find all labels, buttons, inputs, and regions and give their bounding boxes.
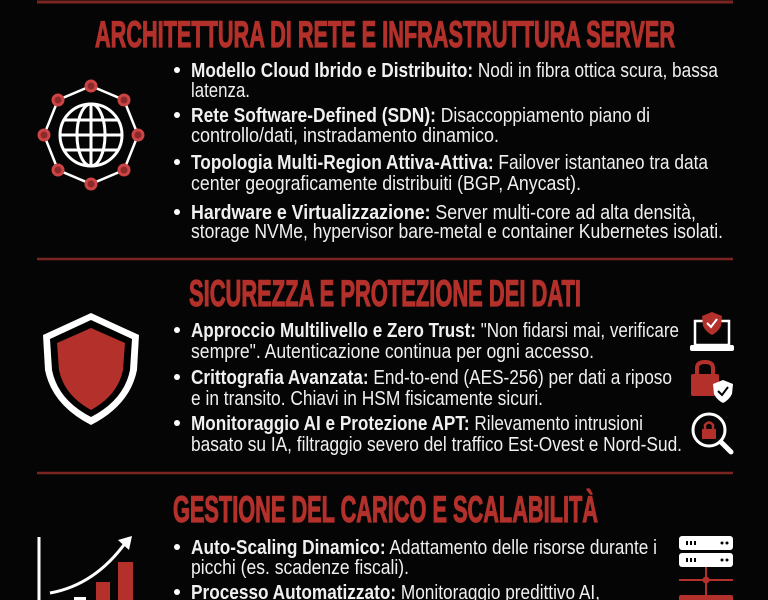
bullets: section 1: Hardware e Virtualizzazione: Server multi-core ad alta densità, [191,202,696,224]
icon: globe network [39,81,143,189]
bullets: section 3: Auto-Scaling Dinamico: Adattamento delle risorse durante i [191,537,657,559]
icon: laptop shield [690,312,734,351]
bullets: section 2: e in transito. Chiavi in HSM fisicamente sicuri. [191,388,543,410]
icon: shield [43,313,139,425]
bullets: section 1 [174,60,723,243]
bullets: section 3 [174,537,657,600]
bullets: section 1: center geograficamente distribuiti (BGP, Anycast). [191,173,581,195]
bullets: section 1: Modello Cloud Ibrido e Distribuito: Nodi in fibra ottica scura, bassa [191,60,719,82]
bullets: section 1: Topologia Multi-Region Attiva-Attiva: Failover istantaneo tra data [191,152,709,174]
bullets: section 3: picchi (es. scadenze fiscali). [191,557,409,579]
bullets: section 2 [174,320,682,456]
bullets: section 2: Crittografia Avanzata: End-to-end (AES-256) per dati a riposo [191,367,672,389]
bullets: section 2: basato su IA, filtraggio severo del traffico Est-Ovest e Nord-Sud. [191,434,682,456]
bullets: section 2: Approccio Multilivello e Zero Trust: "Non fidarsi mai, verificare [191,320,679,342]
icon: lock shield [691,362,733,403]
bullets: section 1: latenza. [191,80,250,102]
icon: growth chart [39,536,133,600]
bullets: section 1: controllo/dati, instradamento dinamico. [191,125,499,147]
bullets: section 1: Rete Software-Defined (SDN): Disaccoppiamento piano di [191,105,650,127]
icon: magnifier lock [693,414,731,452]
bullets: section 2: Monitoraggio AI e Protezione APT: Rilevamento intrusioni [191,413,643,435]
bullets: section 2: sempre". Autenticazione continua per ogni accesso. [191,341,594,363]
icon: servers [679,536,733,600]
